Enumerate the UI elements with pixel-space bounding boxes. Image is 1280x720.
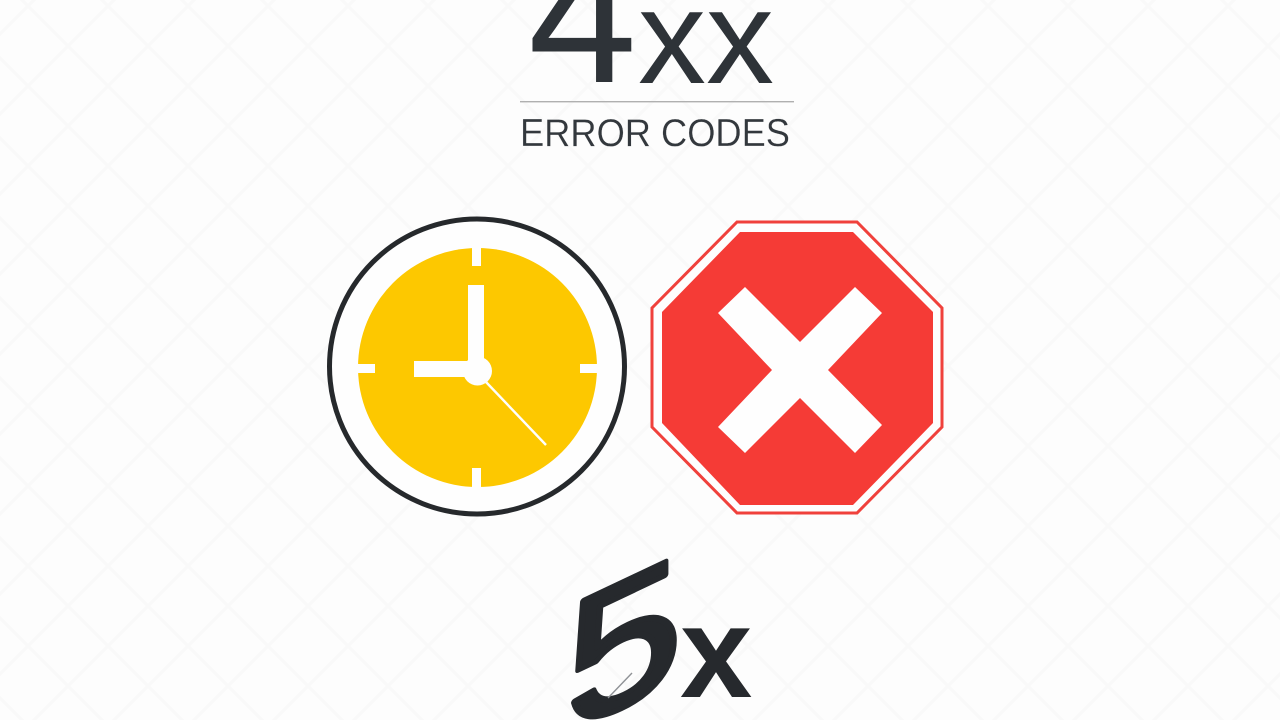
clock second hand bbox=[486, 382, 546, 445]
icon: clock bbox=[330, 219, 624, 514]
clock hub bbox=[463, 356, 492, 386]
divider under heading bbox=[520, 101, 794, 102]
stop sign red fill bbox=[662, 232, 933, 505]
clock hour ticks bbox=[357, 247, 598, 488]
clock yellow face bbox=[358, 248, 597, 487]
heading: 5x (partially drawn) bbox=[566, 514, 752, 720]
clock outer ring bbox=[330, 219, 624, 514]
clock hands bbox=[414, 285, 484, 377]
stop sign outer outline bbox=[652, 222, 942, 513]
subheading: error codes: ERROR CODES bbox=[520, 112, 790, 155]
white cross bbox=[718, 287, 882, 453]
icon: stop sign with cross bbox=[652, 222, 942, 513]
heading: 4xx bbox=[528, 0, 774, 124]
thin stroke inside the 5 bbox=[608, 673, 632, 698]
